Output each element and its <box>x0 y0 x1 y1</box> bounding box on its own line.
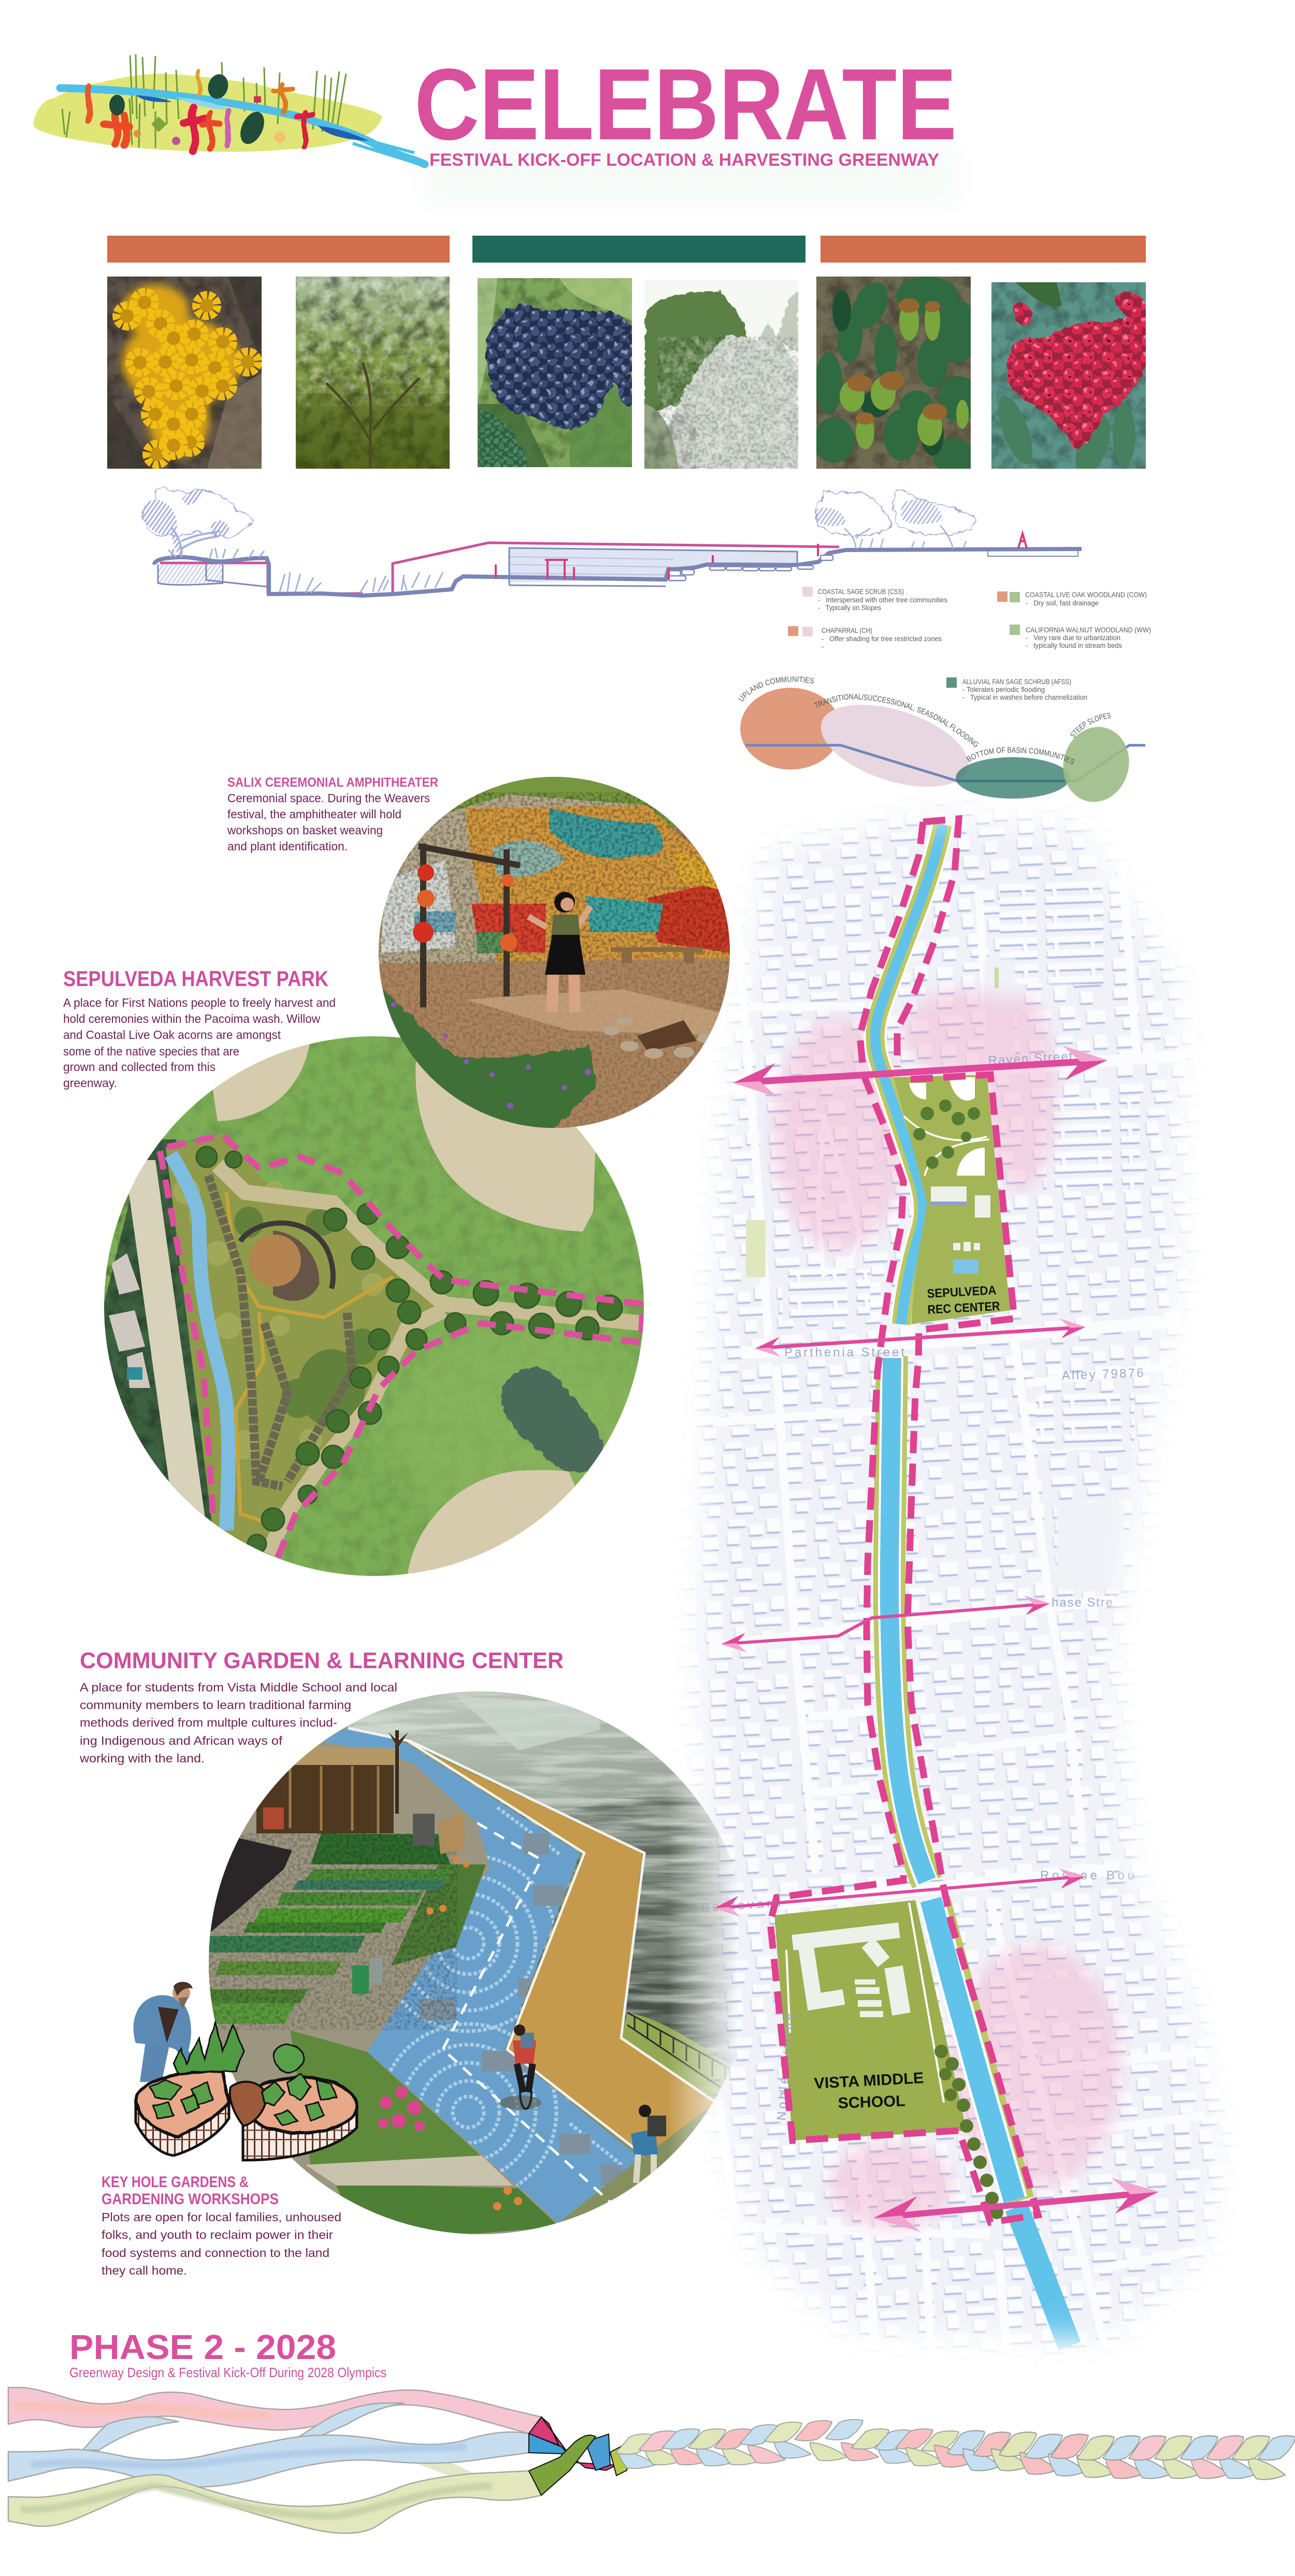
legend: california walnut woodland: CALIFORNIA WALNUT WOODLAND (WW) <box>1026 626 1151 634</box>
curved label: upland communities: UPLAND COMMUNITIES <box>738 676 814 701</box>
colour band: orange left <box>107 236 450 263</box>
garden: bins and boards <box>352 1813 465 1994</box>
ellipse: steep slopes <box>1055 720 1137 809</box>
map: street names <box>701 1049 1145 2121</box>
map: street names: Raven Street <box>988 1049 1074 1068</box>
text block: community garden and learning center <box>79 1648 564 1765</box>
text block: key hole gardens and workshops: Plots are open for local families, unhoused <box>102 2210 341 2224</box>
map: street names: Noble Avenue <box>774 2011 796 2121</box>
woven ribbons: three strands into a braid <box>8 2387 1295 2534</box>
map: vista middle school grounds <box>774 1900 1003 2219</box>
section drawing: wash cross-section <box>141 487 1082 596</box>
photo: green tree <box>296 277 450 469</box>
circle: salix ceremonial amphitheater photo <box>378 776 731 1134</box>
circle: sepulveda harvest park plan <box>98 1036 653 1585</box>
keyhole: left soil <box>136 2071 229 2136</box>
garden: white path edges <box>348 1728 720 2156</box>
section: ground profile <box>154 549 1082 596</box>
ellipse: transitional communities <box>811 689 979 803</box>
text block: community garden and learning center: community members to learn traditional farming <box>80 1698 351 1712</box>
text block: salix ceremonial amphitheater: workshops on basket weaving <box>227 823 383 837</box>
legend: chaparral: - <box>822 642 824 650</box>
arrow: roscoe boulevard <box>712 1866 1087 1919</box>
logo: pots and plants <box>134 96 285 145</box>
text block: sepulveda harvest park: and Coastal Live Oak acorns are amongst <box>63 1028 281 1041</box>
photo: oak leaves and acorns <box>813 277 979 473</box>
garden: flowers <box>378 2086 425 2131</box>
subtitle: FESTIVAL KICK-OFF LOCATION & HARVESTING GREENWAY <box>429 150 939 170</box>
amphitheater: foreground plants <box>379 984 596 1134</box>
garden: soil pile <box>205 1836 292 1937</box>
garden: thatched hut <box>256 1730 408 1833</box>
arrow: raven street <box>732 1043 1109 1100</box>
map: street names: Boulevard <box>701 1895 782 1915</box>
map: pink neighbourhood zones <box>772 989 1121 2230</box>
phase heading: PHASE 2 - 2028 <box>69 2328 336 2367</box>
legend: coastal sage scrub: - Typically on Slopes <box>818 603 881 612</box>
map: site labels: VISTA MIDDLE <box>814 2070 924 2092</box>
legend: coastal sage scrub <box>802 587 947 612</box>
text block: community garden and learning center: A place for students from Vista Middle School and local <box>80 1681 397 1694</box>
logo: dancing figures <box>88 71 312 151</box>
section: right platform <box>988 550 1078 556</box>
text block: key hole gardens and workshops: KEY HOLE GARDENS & <box>102 2174 249 2191</box>
section: right trees <box>815 489 975 549</box>
curved label: transitional: TRANSITIONAL/SUCCESSIONAL, SEASONAL FLOODING <box>814 694 979 747</box>
legend: chaparral: - Offer shading for tree restricted zones <box>822 634 942 643</box>
plan: golden trails <box>226 1192 393 1525</box>
section: left tree <box>141 487 252 558</box>
ribbon: pale braid <box>616 2420 1295 2480</box>
garden: fenced planting <box>621 2013 736 2110</box>
arrow: south crossing <box>872 2174 1160 2236</box>
garden: dashed centre line <box>443 1823 610 2202</box>
text block: sepulveda harvest park: SEPULVEDA HARVEST PARK <box>63 966 328 991</box>
terrain line <box>745 745 1145 781</box>
text block: salix ceremonial amphitheater: SALIX CEREMONIAL AMPHITHEATER <box>227 775 438 790</box>
photo: silver shrub <box>644 280 798 469</box>
section: shrubs in channel <box>168 546 443 593</box>
title: CELEBRATE: CELEBRATE <box>414 48 957 161</box>
photo: red toyon berries <box>991 282 1147 480</box>
garden: cyclist two <box>631 2105 666 2183</box>
text block: key hole gardens and workshops: GARDENING WORKSHOPS <box>102 2191 279 2208</box>
map: site labels <box>814 1283 1000 2112</box>
text block: salix ceremonial amphitheater: festival, the amphitheater will hold <box>227 807 401 821</box>
text block: key hole gardens and workshops: folks, and youth to reclaim power in their <box>102 2228 333 2241</box>
garden: tan gravel path <box>410 1744 715 2156</box>
map: street names: Roscoe Bou <box>1040 1869 1135 1883</box>
gardener <box>134 1982 193 2082</box>
map: site labels: SEPULVEDA <box>927 1283 997 1301</box>
ellipse: bottom of basin communities <box>956 757 1070 799</box>
garden: blue bike path <box>318 1728 640 2223</box>
text block: salix ceremonial amphitheater: Ceremonial space. During the Weavers <box>227 791 430 805</box>
text block: sepulveda harvest park: hold ceremonies within the Pacoima wash. Willow <box>63 1012 320 1025</box>
text block: key hole gardens and workshops: they call home. <box>102 2264 187 2277</box>
legend: coastal live oak woodland <box>997 590 1147 607</box>
map: streets <box>673 861 1204 2349</box>
plan: tree shadow <box>501 1367 606 1472</box>
colour band: orange right <box>821 236 1146 263</box>
legend: chaparral: CHAPARRAL (CH) <box>822 626 872 634</box>
logo: river <box>60 88 425 164</box>
legend: california walnut woodland: - Very rare due to urbanization <box>1026 633 1120 642</box>
photo: yellow flowers <box>107 277 262 469</box>
legend: coastal live oak woodland: - Dry soil, fast drainage <box>1026 599 1099 607</box>
keyhole: right bed wall <box>243 2103 357 2160</box>
amphitheater: fire pit <box>603 1017 714 1059</box>
logo: festival river illustration <box>33 54 425 166</box>
ribbon: knot of saturated colour <box>529 2417 629 2495</box>
map: sepulveda rec center park <box>894 1075 1010 1324</box>
map: site labels: REC CENTER <box>927 1299 1000 1317</box>
amphitheater: bench <box>611 947 703 963</box>
keyhole: right soil <box>245 2077 357 2133</box>
legend: plant communities <box>788 587 1151 701</box>
map: street names: Parthenia Street <box>784 1345 905 1359</box>
diagram: topographic plant community ellipses <box>737 675 1145 809</box>
plan: satellite neighbourhood edge <box>98 1139 223 1580</box>
curved label: steep slopes: STEEP SLOPES <box>1070 713 1111 737</box>
text block: key hole gardens and workshops: food systems and connection to the land <box>102 2246 329 2260</box>
map: pink dashed project boundary <box>770 819 1038 2222</box>
garden: orange flowers <box>426 1856 522 2210</box>
text block: community garden and learning center: working with the land. <box>79 1752 205 1765</box>
text block: salix ceremonial amphitheater <box>227 775 438 853</box>
plan: trees <box>196 1147 622 1553</box>
text block: sepulveda harvest park: grown and collected from this <box>63 1060 215 1074</box>
phase subheading: Greenway Design & Festival Kick-Off During 2028 Olympics <box>69 2365 386 2380</box>
photo: blue elderberries <box>478 278 635 467</box>
garden: cyclist one <box>500 2024 541 2110</box>
map: site labels: SCHOOL <box>838 2092 905 2112</box>
plan: rock walls <box>208 1176 352 1486</box>
legend: coastal sage scrub: - Interspersed with other tree communities <box>818 596 947 604</box>
plan: tan ball fields <box>205 1036 596 1585</box>
legend: california walnut woodland: - typically found in stream beds <box>1026 641 1122 649</box>
ellipse: upland communities <box>740 688 841 770</box>
keyhole: plants <box>150 2022 337 2126</box>
text block: key hole gardens and workshops <box>102 2174 341 2277</box>
curved label: bottom of basin: BOTTOM OF BASIN COMMUNITIES <box>967 747 1074 764</box>
ribbon: blue strand <box>8 2403 529 2487</box>
legend: coastal sage scrub: COASTAL SAGE SCRUB (CSS) <box>818 587 904 596</box>
ribbon: pink strand <box>8 2387 541 2434</box>
amphitheater: wooden gate with red leaves <box>413 844 520 1007</box>
logo: reeds <box>62 54 346 148</box>
legend: alluvial fan sage scrub: - Typical in washes before channelization <box>962 693 1087 701</box>
map: connection arrows <box>712 1043 1160 2236</box>
keyhole: left bed wall <box>136 2095 229 2155</box>
logo: dark seed pods <box>109 72 269 148</box>
map: faint green patches <box>746 967 999 1277</box>
circle: community garden and bike path <box>205 1683 756 2242</box>
map: upper channel <box>875 824 943 1324</box>
arrow: chase street <box>721 1594 1051 1654</box>
plan: blue stream <box>171 1154 228 1530</box>
legend: alluvial fan sage scrub: ALLUVIAL FAN SAGE SCHRUB (AFSS) <box>962 677 1071 686</box>
arrow: parthenia street <box>754 1317 1086 1358</box>
title glow <box>425 148 958 205</box>
text block: salix ceremonial amphitheater: and plant identification. <box>227 840 348 853</box>
text block: community garden and learning center: ing Indigenous and African ways of <box>80 1734 283 1747</box>
logo: meadow blob <box>33 74 382 152</box>
text block: community garden and learning center: COMMUNITY GARDEN & LEARNING CENTER <box>80 1648 564 1673</box>
section: pink walkway line <box>160 543 839 594</box>
section: left planter wall <box>158 557 268 587</box>
garden: plots and ground <box>207 1740 559 2242</box>
section: amphitheater volume <box>509 548 797 586</box>
amphitheater: grass above wall <box>378 776 731 828</box>
text block: community garden and learning center: methods derived from multple cultures includ- <box>80 1716 337 1729</box>
keyhole: center basket <box>230 2082 267 2126</box>
plan: tan paths <box>218 1165 643 1554</box>
text block: sepulveda harvest park: some of the native species that are <box>63 1045 239 1058</box>
plan: pink dashed boundary <box>160 1135 643 1557</box>
plan: greenway interior <box>166 1135 444 1554</box>
colour band: green centre <box>472 236 805 263</box>
amphitheater: dirt ground <box>379 958 731 1129</box>
ribbon: green strand <box>8 2471 541 2534</box>
map: open parcels <box>984 958 1124 2009</box>
legend: alluvial fan sage scrub: - Tolerates periodic flooding <box>962 685 1045 693</box>
amphitheater: singer <box>528 892 591 1012</box>
text block: sepulveda harvest park: A place for First Nations people to freely harvest and <box>63 996 336 1009</box>
section: pink figures <box>496 533 1027 580</box>
garden: water surface <box>332 1683 751 2103</box>
legend: alluvial fan sage scrub <box>946 677 1087 701</box>
illustration: keyhole garden with gardener <box>134 1982 357 2160</box>
legend: california walnut woodland <box>1010 625 1151 649</box>
map: street names: Alley 79876 <box>1061 1366 1145 1383</box>
map: aerial of the greenway <box>648 777 1269 2408</box>
amphitheater: stone gabion terraces <box>378 792 731 974</box>
legend: coastal live oak woodland: COASTAL LIVE OAK WOODLAND (COW) <box>1025 590 1147 599</box>
map: street names: hase Stre <box>1052 1596 1114 1610</box>
map: lower channel <box>889 1356 1070 2346</box>
text block: sepulveda harvest park <box>63 966 336 1090</box>
legend: chaparral <box>788 626 942 650</box>
map: building footprints <box>648 777 1269 2408</box>
plan: amphitheater <box>240 1223 333 1301</box>
section: gabion rocks <box>668 555 833 581</box>
text block: sepulveda harvest park: greenway. <box>63 1076 117 1090</box>
